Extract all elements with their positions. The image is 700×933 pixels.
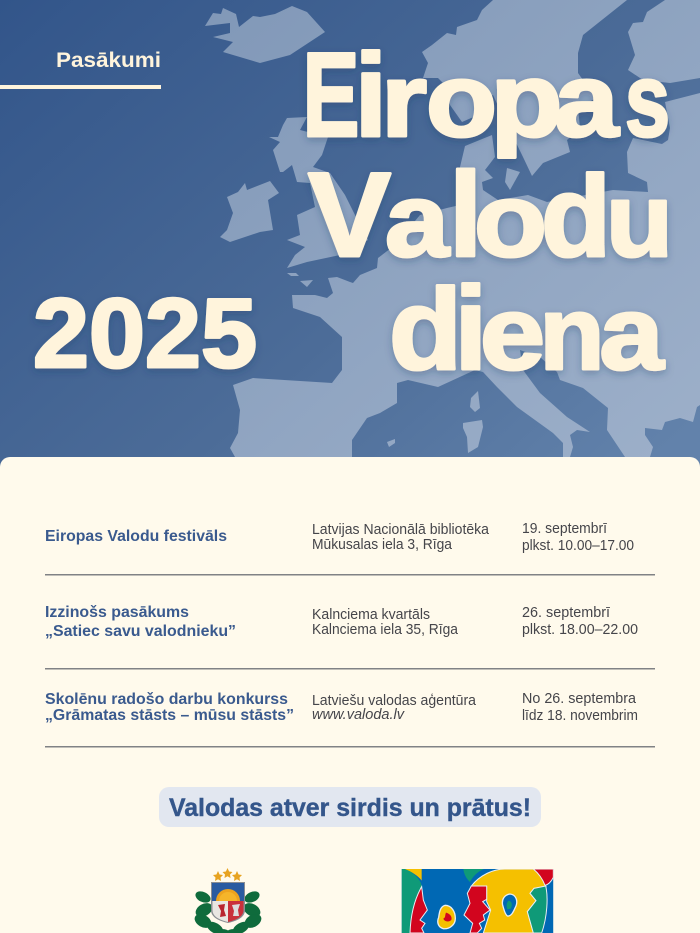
leaves xyxy=(192,889,264,933)
section label: Pasākumi: Pasākumi xyxy=(56,49,161,72)
event 1: Eiropas Valodu festivāls: Eiropas Valodu festivāls xyxy=(45,528,227,545)
event 1: Eiropas Valodu festivāls: plkst. 10.00–17.00 xyxy=(522,538,634,554)
panel: hero header with map xyxy=(0,0,700,470)
stars xyxy=(213,868,242,881)
panel background xyxy=(0,457,700,933)
title: Eiropas Valodu diena: e xyxy=(480,276,545,392)
title: Eiropas Valodu diena xyxy=(302,28,673,395)
event 2: Satiec savu valodnieku xyxy=(45,604,638,640)
event 2: Satiec savu valodnieku: Izzinošs pasākums xyxy=(45,604,189,621)
event 2: Satiec savu valodnieku: Kalnciema iela 35, Rīga xyxy=(312,622,459,638)
title: Eiropas Valodu diena: a xyxy=(600,276,665,392)
large yellow head xyxy=(471,869,546,933)
event 1: Eiropas Valodu festivāls xyxy=(45,521,634,554)
icon: Latvian coat of arms xyxy=(192,868,264,933)
right green face xyxy=(527,886,547,933)
title: Eiropas Valodu diena: p xyxy=(490,43,562,159)
event 3: Grāmatas stāsts: „Grāmatas stāsts – mūsu stāsts” xyxy=(45,707,294,724)
left face xyxy=(402,869,422,933)
title: Eiropas Valodu diena: a xyxy=(554,43,620,159)
event 1: Eiropas Valodu festivāls: Latvijas Nacionālā bibliotēka xyxy=(312,522,490,538)
top right red xyxy=(533,869,553,885)
title: Eiropas Valodu diena: E xyxy=(302,28,360,162)
event 2: Satiec savu valodnieku: 26. septembrī xyxy=(522,605,610,621)
title: Eiropas Valodu diena: r xyxy=(381,43,427,159)
title: Eiropas Valodu diena: i xyxy=(454,263,487,395)
event 2: Satiec savu valodnieku: Kalnciema kvartāls xyxy=(312,607,430,623)
map of Europe xyxy=(205,0,700,457)
yellow ear xyxy=(438,905,455,929)
event 3: Grāmatas stāsts: Latviešu valodas aģentūra xyxy=(312,693,477,709)
shield xyxy=(211,882,245,923)
icon: European Day of Languages logo xyxy=(402,869,553,933)
title: Eiropas Valodu diena: a xyxy=(385,163,450,279)
year: 2025: 2025 xyxy=(33,278,257,388)
event 3: Grāmatas stāsts: No 26. septembra xyxy=(522,691,637,707)
hero background xyxy=(0,0,700,470)
title: Eiropas Valodu diena: d xyxy=(389,266,462,394)
title: Eiropas Valodu diena: V xyxy=(308,148,391,282)
blue ear xyxy=(502,894,517,916)
event 2: Satiec savu valodnieku: plkst. 18.00–22.00 xyxy=(522,622,638,638)
title: Eiropas Valodu diena: n xyxy=(540,276,604,392)
slogan pill xyxy=(159,787,541,827)
title: Eiropas Valodu diena: o xyxy=(474,163,547,279)
event 2: Satiec savu valodnieku: „Satiec savu valodnieku” xyxy=(45,623,236,640)
event 3: Grāmatas stāsts: līdz 18. novembrim xyxy=(522,708,638,724)
panel: events list xyxy=(0,457,700,933)
title: Eiropas Valodu diena: i xyxy=(354,30,387,162)
title: Eiropas Valodu diena: s xyxy=(625,43,670,159)
section label: Pasākumi xyxy=(0,49,161,89)
event 1: Eiropas Valodu festivāls: Mūkusalas iela 3, Rīga xyxy=(312,537,453,553)
title: Eiropas Valodu diena: l xyxy=(449,148,482,282)
title: Eiropas Valodu diena: u xyxy=(606,163,673,279)
title: Eiropas Valodu diena: d xyxy=(541,153,611,281)
event 3: Grāmatas stāsts: www.valoda.lv xyxy=(312,707,405,723)
event 1: Eiropas Valodu festivāls: 19. septembrī xyxy=(522,521,607,537)
event 3: Grāmatas stāsts xyxy=(45,691,638,724)
top green xyxy=(463,869,484,882)
slogan pill: Valodas atver sirdis un prātus! xyxy=(169,794,531,822)
center red face xyxy=(464,886,490,933)
event 3: Grāmatas stāsts: Skolēnu radošo darbu konkurss xyxy=(45,691,288,708)
title: Eiropas Valodu diena: o xyxy=(426,43,497,159)
